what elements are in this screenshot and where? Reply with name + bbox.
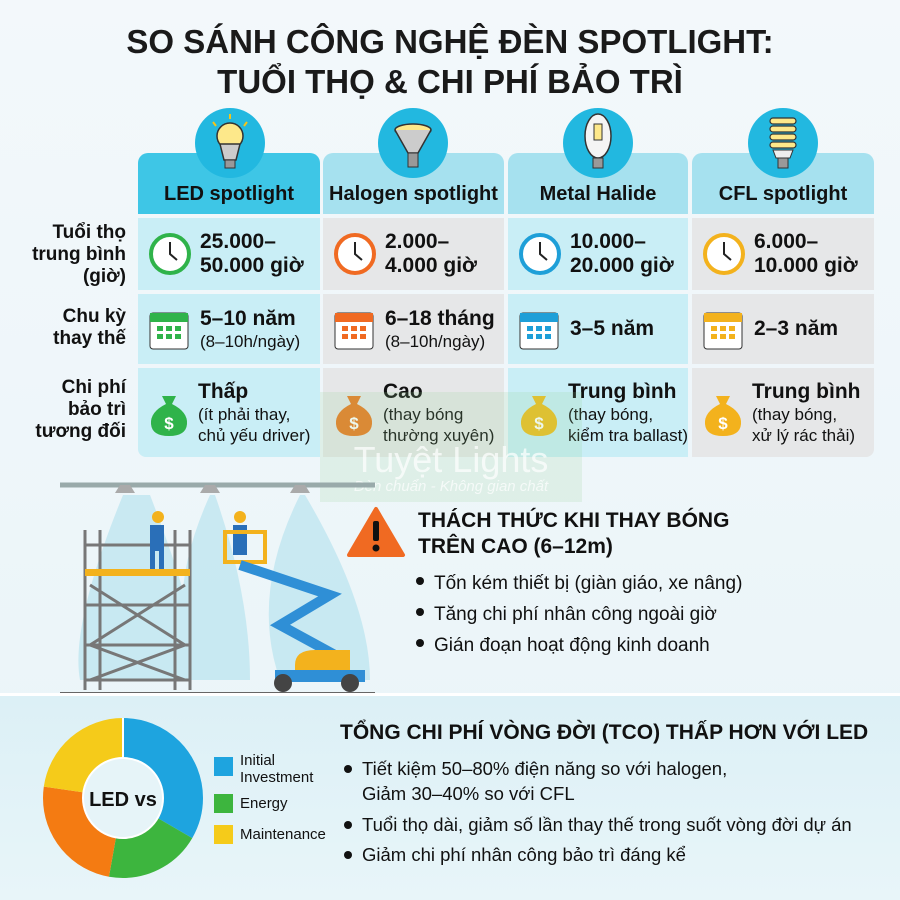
legend: Investment: [240, 769, 313, 786]
text: 4.000 giờ: [385, 254, 477, 277]
header: LED: [138, 153, 320, 214]
row 3 cells: [138, 368, 320, 457]
icon: metal halide bulb: [563, 108, 633, 178]
text: 10.000 giờ: [754, 254, 858, 277]
row label: replacement cycle: [53, 306, 126, 349]
header: Metal Halide: Metal Halide: [540, 183, 656, 205]
text: (8–10h/ngày): [385, 332, 485, 350]
text: $: [534, 414, 544, 432]
donut chart: [43, 718, 203, 878]
text: (thay bóng: [383, 404, 463, 424]
text: Trung bình: [752, 380, 860, 402]
watermark: Tuyệt Lights: [354, 439, 548, 480]
watermark: [320, 392, 582, 502]
row label: maintenance cost: bảo trì: [68, 399, 126, 420]
row 3 cells: Thấp: [198, 380, 248, 402]
legend: Energy: [240, 795, 288, 812]
title: TUỔI THỌ & CHI PHÍ BẢO TRÌ: [217, 63, 683, 100]
header: CFL: [692, 153, 874, 214]
illustration: workers on scaffold and lift: [60, 482, 375, 693]
text: Trung bình: [568, 380, 676, 402]
row label: replacement cycle: thay thế: [53, 328, 126, 349]
TCO bullets: Giảm chi phí nhân công bảo trì đáng kể: [362, 844, 686, 865]
challenge heading: THÁCH THỨC KHI THAY BÓNG: [418, 509, 729, 532]
row label: lifespan: (giờ): [83, 266, 126, 287]
donut chart: LED vs: [89, 789, 157, 811]
TCO bullets: Giảm 30–40% so với CFL: [362, 783, 575, 804]
header: CFL: CFL spotlight: [719, 183, 847, 205]
text: 2.000–: [385, 230, 449, 253]
legend: Initial: [240, 752, 275, 769]
TCO heading: TỔNG CHI PHÍ VÒNG ĐỜI (TCO) THẤP HƠN VỚI LED: [340, 721, 868, 744]
icon: CFL bulb: [748, 108, 818, 178]
row 2 cells: (8–10h/ngày): [200, 332, 300, 350]
header: Halogen: [323, 153, 504, 214]
row 3 cells: $: [164, 414, 174, 432]
title: [126, 23, 774, 100]
row label: replacement cycle: Chu kỳ: [63, 306, 126, 327]
row 2 cells: 5–10 năm: [200, 306, 296, 330]
text: (thay bóng,: [752, 404, 837, 424]
row label: maintenance cost: tương đối: [35, 421, 126, 442]
row 1 cells: 25.000–: [200, 230, 276, 253]
row 3 cells: chủ yếu driver): [198, 426, 310, 444]
bottom panel background: [0, 693, 900, 900]
text: Cao: [383, 380, 423, 402]
icon: halogen bulb: [378, 108, 448, 178]
text: (thay bóng,: [568, 404, 653, 424]
TCO bullets: Tiết kiệm 50–80% điện năng so với halogen,: [362, 758, 727, 779]
text: kiểm tra ballast): [568, 426, 688, 444]
text: xử lý rác thải): [752, 426, 855, 444]
text: 2–3 năm: [754, 317, 838, 340]
legend: [214, 752, 326, 844]
text: 3–5 năm: [570, 317, 654, 340]
icon: warning triangle: [347, 506, 406, 557]
text: 10.000–: [570, 230, 646, 253]
row label: maintenance cost: [35, 377, 127, 442]
text: 6.000–: [754, 230, 818, 253]
legend: Maintenance: [240, 826, 326, 843]
text: 20.000 giờ: [570, 254, 674, 277]
row 1 cells: [138, 218, 320, 290]
text: thường xuyên): [383, 426, 494, 444]
watermark: Đèn chuẩn - Không gian chất: [354, 478, 548, 495]
TCO bullets: Tuổi thọ dài, giảm số lần thay thế trong suốt vòng đời dự án: [362, 814, 852, 835]
challenge heading: TRÊN CAO (6–12m): [418, 535, 613, 558]
challenge bullets: Tăng chi phí nhân công ngoài giờ: [434, 604, 717, 625]
header: Metal Halide: [508, 153, 688, 214]
row label: lifespan: [32, 222, 126, 287]
title: SO SÁNH CÔNG NGHỆ ĐÈN SPOTLIGHT:: [126, 23, 774, 60]
row label: lifespan: trung bình: [32, 244, 126, 265]
challenge bullets: Gián đoạn hoạt động kinh doanh: [434, 635, 710, 656]
header: LED: LED spotlight: [164, 183, 294, 205]
text: $: [349, 414, 359, 432]
TCO bullets: [344, 758, 852, 865]
challenge bullets: [416, 573, 742, 656]
challenge heading: [418, 508, 729, 558]
icon: LED bulb: [195, 108, 265, 178]
row 3 cells: (ít phải thay,: [198, 404, 290, 424]
row label: lifespan: Tuổi thọ: [52, 222, 126, 243]
row 2 cells: [138, 294, 320, 364]
text: 6–18 tháng: [385, 306, 495, 330]
header: Halogen: Halogen spotlight: [329, 183, 498, 205]
row 1 cells: 50.000 giờ: [200, 254, 304, 277]
text: $: [718, 414, 728, 432]
row label: maintenance cost: Chi phí: [62, 377, 126, 398]
challenge bullets: Tốn kém thiết bị (giàn giáo, xe nâng): [434, 573, 742, 594]
